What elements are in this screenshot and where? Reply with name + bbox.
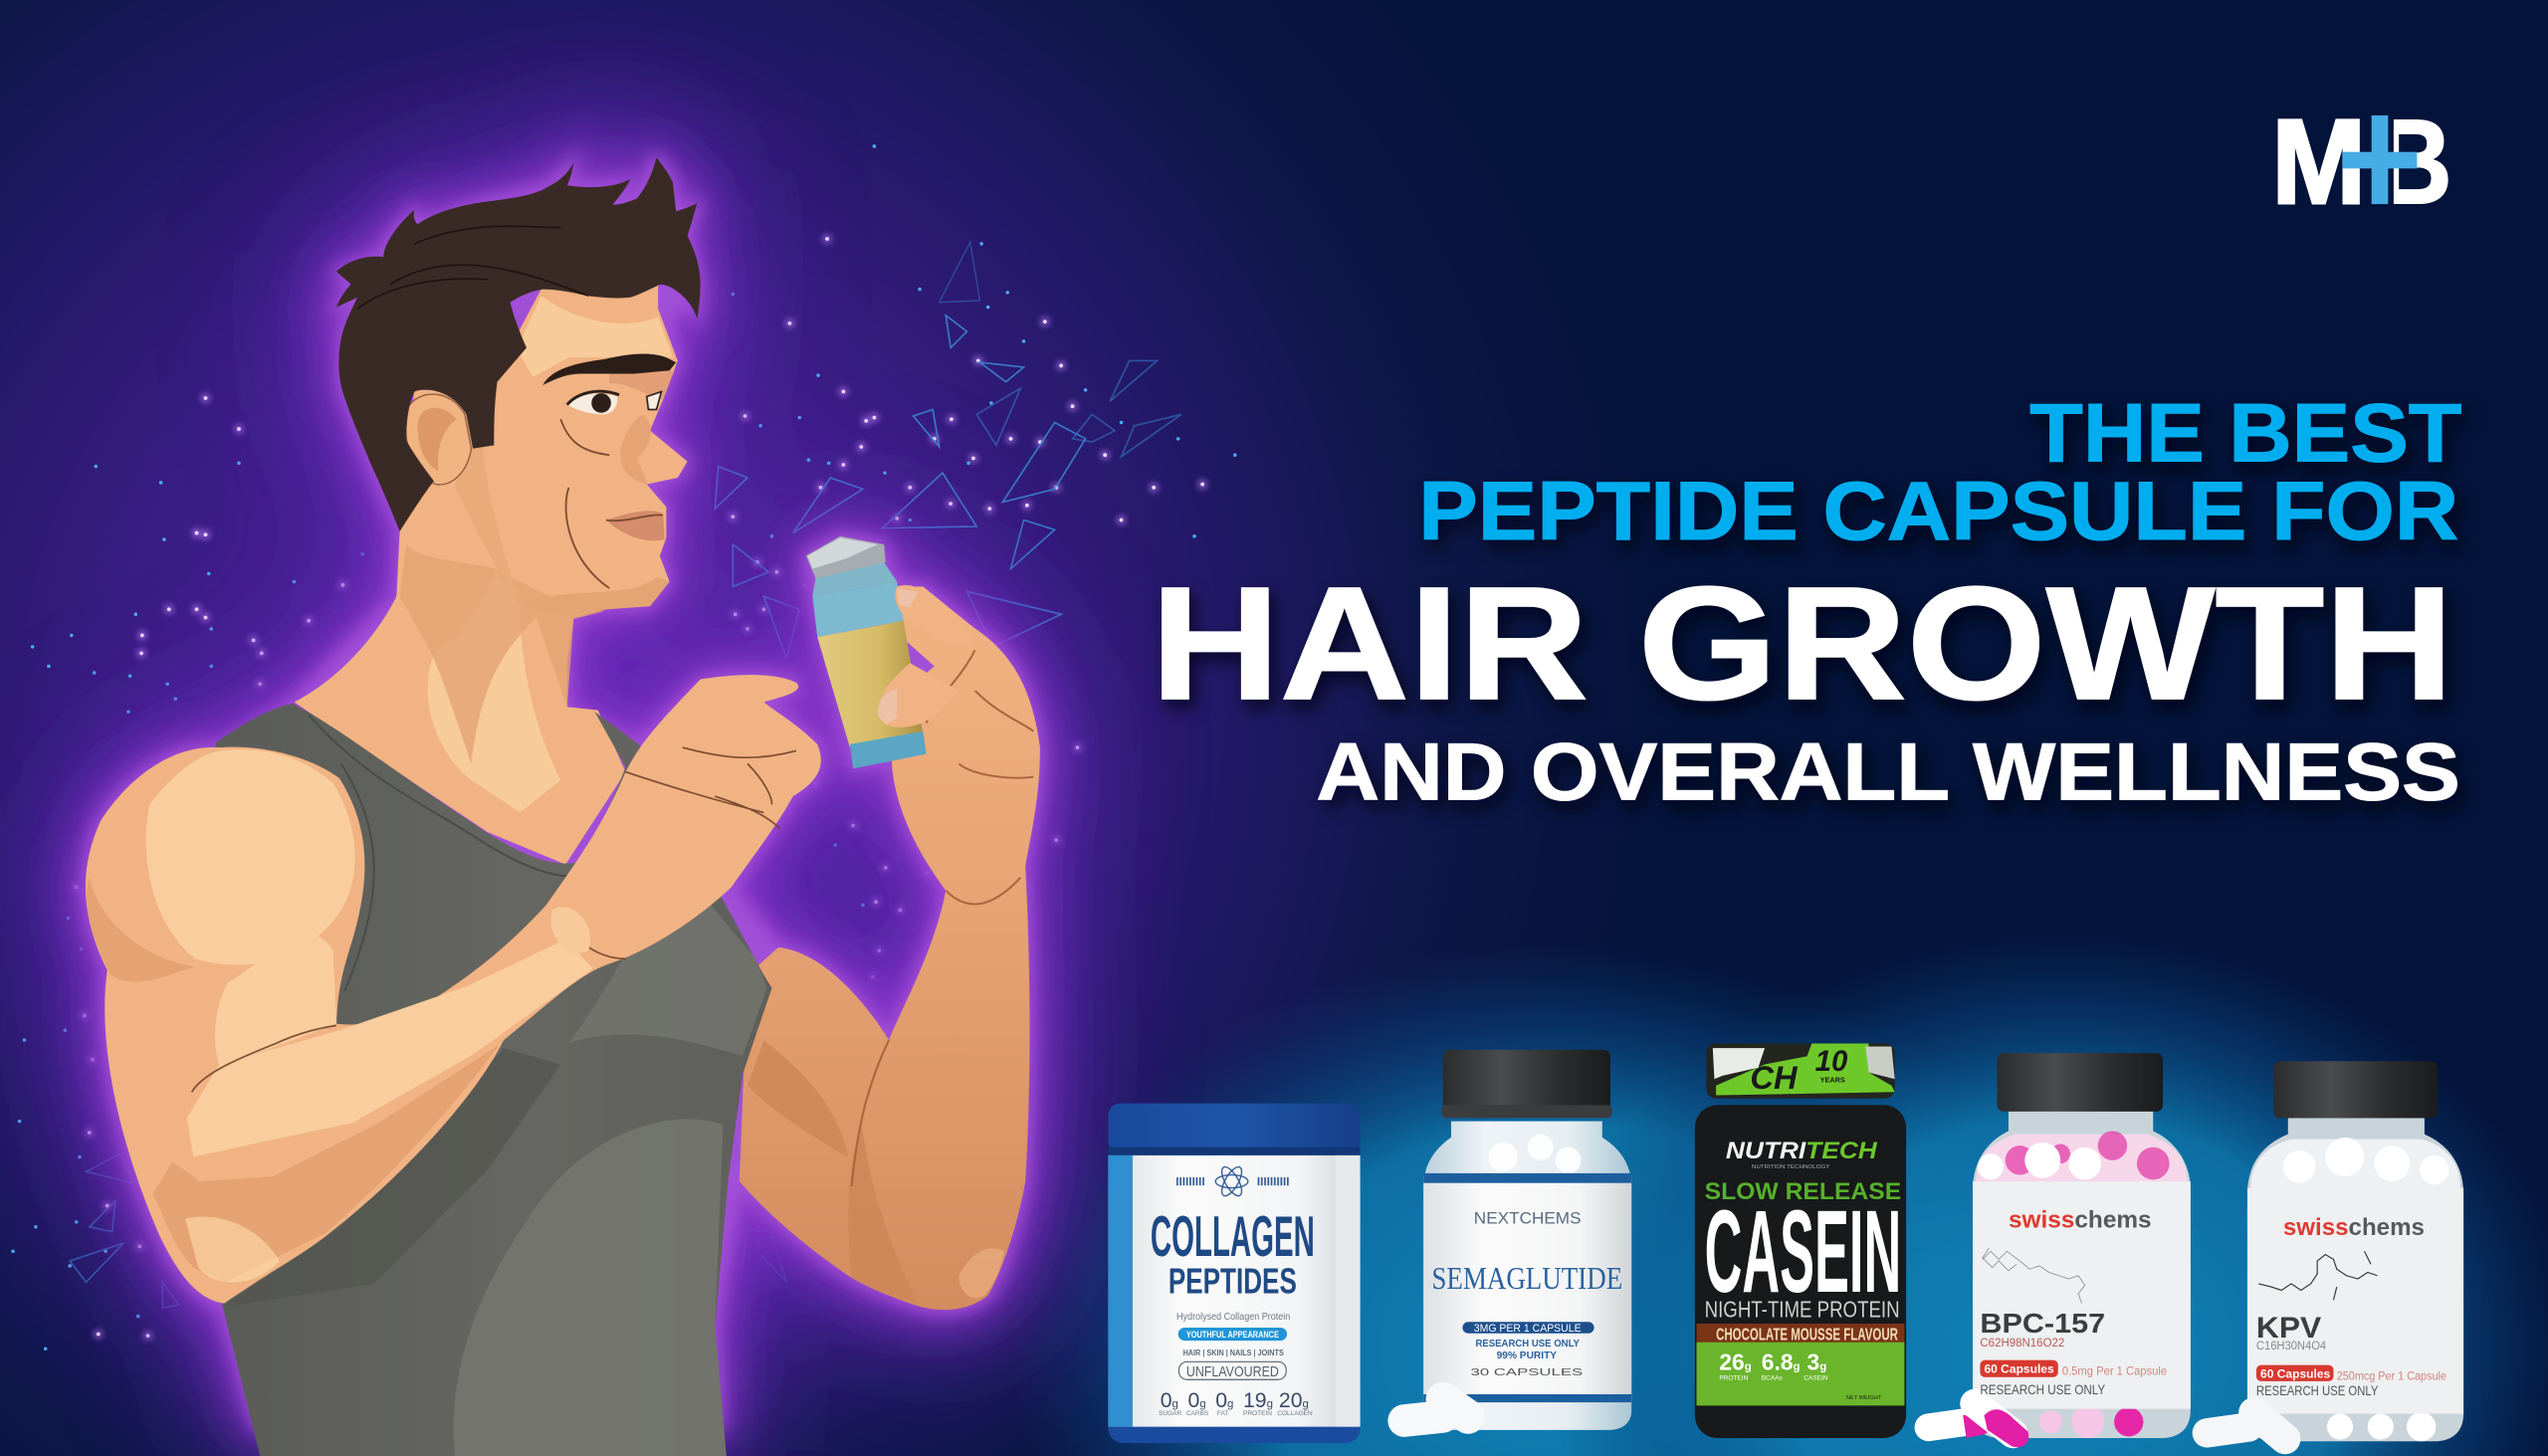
blue glow behind products xyxy=(1007,927,2548,1456)
product: BPC-157 bottle: BPC-157 xyxy=(1980,1308,2105,1339)
ear xyxy=(405,394,471,485)
product: BPC-157 bottle: C62H98N16O22 xyxy=(1980,1336,2064,1350)
products row: CASEIN xyxy=(1705,1186,1901,1317)
hair xyxy=(336,157,701,531)
product: semaglutide bottle: 30 CAPSULES xyxy=(1471,1367,1584,1378)
product: collagen peptides tub: 0g xyxy=(1161,1389,1178,1412)
product: casein tub: PROTEIN xyxy=(1719,1374,1749,1381)
product: collagen peptides tub: HAIR | SKIN | NAILS | JOINTS xyxy=(1183,1349,1284,1357)
front arm and hand xyxy=(86,675,821,1304)
product: casein tub: NIGHT-TIME PROTEIN xyxy=(1705,1296,1900,1322)
eye and brow xyxy=(542,354,676,414)
logo: MHB: M xyxy=(2271,95,2366,229)
product: KPV bottle: 60 Capsules xyxy=(2260,1367,2330,1381)
product: collagen peptides tub: 19g xyxy=(1243,1389,1273,1412)
fingers on vial xyxy=(878,585,975,728)
product: semaglutide bottle: SEMAGLUTIDE xyxy=(1431,1261,1622,1296)
product: KPV bottle: 250mcg Per 1 Capsule xyxy=(2337,1368,2446,1382)
product: collagen peptides tub: Hydrolysed Collagen Protein xyxy=(1176,1312,1290,1323)
product: KPV bottle: KPV xyxy=(2256,1312,2322,1345)
product: collagen peptides tub: FAT xyxy=(1217,1410,1228,1417)
product: casein tub: 26g xyxy=(1719,1349,1752,1374)
product: collagen peptides tub: PEPTIDES xyxy=(1168,1261,1297,1302)
product: casein tub: SLOW RELEASE xyxy=(1705,1178,1901,1205)
product: collagen peptides tub: COLLAGEN xyxy=(1277,1410,1313,1417)
logo: MHB: B xyxy=(2376,95,2452,229)
molecular triangles xyxy=(70,242,1181,1308)
product: KPV bottle: swisschems xyxy=(2283,1214,2425,1241)
product: casein tub: NET WEIGHT xyxy=(1846,1395,1882,1401)
product: BPC-157 bottle: 0.5mg Per 1 Capsule xyxy=(2062,1363,2167,1377)
heading: and overall wellness: AND OVERALL WELLNESS xyxy=(1316,727,2460,817)
lid graphic: YEARS xyxy=(1820,1075,1845,1084)
heading: the best: THE BEST xyxy=(2029,387,2461,480)
product: BPC-157 bottle: 60 Capsules xyxy=(1984,1362,2054,1376)
product: semaglutide bottle: 3MG PER 1 CAPSULE xyxy=(1474,1323,1582,1335)
product: KPV bottle xyxy=(2191,1061,2463,1456)
logo: MHB xyxy=(2271,95,2452,229)
product: semaglutide bottle: 99% PURITY xyxy=(1497,1351,1558,1361)
heading: hair growth: HAIR GROWTH xyxy=(1151,554,2453,733)
purple glow around figure xyxy=(86,157,1040,1427)
capsules xyxy=(1386,1375,1492,1440)
product: BPC-157 bottle xyxy=(1913,1053,2191,1454)
product: casein tub: CHOCOLATE MOUSSE FLAVOUR xyxy=(1716,1324,1898,1344)
product: casein tub: 3g xyxy=(1807,1349,1826,1374)
product: KPV bottle: C16H30N4O4 xyxy=(2256,1339,2326,1352)
product: casein tub xyxy=(1695,1043,1906,1438)
lid graphic: CH xyxy=(1750,1059,1799,1096)
lid graphic xyxy=(1713,1043,1895,1096)
product: casein tub: NUTRI TECH xyxy=(1726,1138,1878,1164)
product: collagen peptides tub xyxy=(1108,1104,1361,1443)
atom logo xyxy=(1215,1164,1248,1198)
star particles xyxy=(13,146,1235,1349)
product: semaglutide bottle xyxy=(1386,1050,1631,1440)
product: collagen peptides tub: 20g xyxy=(1279,1389,1309,1412)
product: collagen peptides tub: 0g xyxy=(1215,1389,1233,1412)
product: casein tub: BCAAs xyxy=(1762,1374,1784,1381)
vial xyxy=(806,536,927,768)
heading: peptide capsule for: PEPTIDE CAPSULE FOR xyxy=(1418,465,2458,557)
product: casein tub: CASEIN xyxy=(1804,1374,1828,1381)
product: collagen peptides tub: CARBS xyxy=(1186,1410,1209,1417)
back arm and hand xyxy=(740,586,1040,1310)
figure: man holding vial xyxy=(86,157,1040,1456)
title xyxy=(1151,387,2461,817)
product: KPV bottle: RESEARCH USE ONLY xyxy=(2256,1382,2378,1398)
product: collagen peptides tub: PROTEIN xyxy=(1243,1410,1272,1417)
lid graphic: 10 xyxy=(1815,1045,1848,1078)
product: semaglutide bottle: RESEARCH USE ONLY xyxy=(1475,1339,1580,1350)
product: collagen peptides tub: COLLAGEN xyxy=(1151,1205,1315,1269)
capsules xyxy=(1913,1383,2033,1454)
capsules xyxy=(2191,1391,2307,1456)
product: collagen peptides tub: UNFLAVOURED xyxy=(1186,1364,1279,1380)
product: BPC-157 bottle: RESEARCH USE ONLY xyxy=(1980,1381,2105,1397)
product: casein tub: NUTRITION TECHNOLOGY xyxy=(1752,1164,1830,1170)
product: casein tub: 6.8g xyxy=(1762,1349,1801,1374)
head and neck xyxy=(295,285,688,865)
tank top xyxy=(162,704,772,1456)
product: collagen peptides tub: SUGAR xyxy=(1159,1410,1182,1417)
product: collagen peptides tub: 0g xyxy=(1187,1389,1206,1412)
product: semaglutide bottle: NEXTCHEMS xyxy=(1474,1210,1582,1228)
products row xyxy=(1108,1043,2463,1456)
product: collagen peptides tub: YOUTHFUL APPEARANCE xyxy=(1186,1330,1279,1340)
product: BPC-157 bottle: swisschems xyxy=(2009,1207,2152,1234)
